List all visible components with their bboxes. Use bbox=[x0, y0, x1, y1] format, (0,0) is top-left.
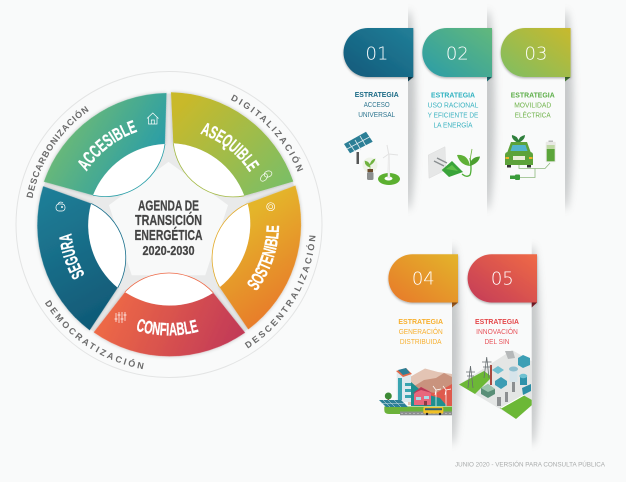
card 03: ELÉCTRICA bbox=[515, 110, 551, 120]
card 04 bbox=[388, 254, 458, 346]
center title bbox=[134, 198, 203, 258]
card 01: 01 bbox=[366, 44, 388, 64]
icon: house bbox=[147, 113, 158, 124]
card 04: DISTRIBUIDA bbox=[400, 337, 442, 346]
label: descarbonización: DESCARBONIZACIÓN bbox=[26, 106, 89, 198]
gaps behind segments bbox=[38, 94, 300, 356]
card 04: ESTRATEGIA bbox=[398, 317, 444, 326]
illustration: solar panel, bulb, wind turbine bbox=[344, 132, 400, 185]
card 02: LA ENERGÍA bbox=[434, 120, 473, 130]
center title: ENERGÉTICA bbox=[134, 227, 203, 244]
label: confiable: CONFIABLE bbox=[137, 319, 198, 336]
label: sostenible: SOSTENIBLE bbox=[247, 226, 280, 290]
icon: sliders bbox=[114, 312, 126, 323]
center title: TRANSICIÓN bbox=[135, 211, 202, 229]
footer note: JUNIO 2020 - VERSIÓN PARA CONSULTA PÚBLICA bbox=[455, 462, 605, 468]
center pentagon bbox=[109, 162, 228, 276]
card 05: ESTRATEGIA bbox=[475, 317, 520, 326]
card 02 bbox=[422, 28, 492, 130]
segment: segura bbox=[0, 174, 151, 330]
icon: leaves bbox=[259, 170, 273, 183]
card 05: INNOVACIÓN bbox=[476, 327, 518, 336]
illustration: power plant isometric bbox=[459, 350, 533, 419]
card 05: 05 bbox=[491, 268, 514, 290]
label: democratización: DEMOCRATIZACIÓN bbox=[45, 300, 144, 370]
card 04: GENERACIÓN bbox=[399, 327, 443, 336]
label: asequible: ASEQUIBLE bbox=[200, 122, 260, 172]
label: accesible: ACCESIBLE bbox=[78, 120, 138, 172]
label: segura: SEGURA bbox=[59, 233, 84, 280]
card 01: ESTRATEGIA bbox=[355, 90, 399, 99]
segment: accesible bbox=[44, 65, 181, 214]
card 05: DEL SIN bbox=[484, 337, 510, 346]
segment: sostenible bbox=[196, 186, 333, 334]
label: digitalización: DIGITALIZACIÓN bbox=[231, 94, 304, 172]
illustration: electric car and battery bbox=[505, 135, 556, 180]
card 02: Y EFICIENTE DE bbox=[428, 110, 478, 120]
card 03: 03 bbox=[525, 44, 547, 64]
card 02: USO RACIONAL bbox=[428, 100, 478, 110]
card 03 bbox=[501, 28, 571, 120]
icon: gear bbox=[267, 203, 275, 211]
card 03: MOVILIDAD bbox=[514, 100, 551, 110]
segment: asequible bbox=[171, 92, 293, 197]
illustration: green plug and outlet bbox=[428, 147, 480, 178]
card 01 bbox=[344, 28, 413, 119]
center title: 2020-2030 bbox=[142, 244, 195, 258]
card 02: 02 bbox=[446, 44, 469, 64]
icon: lock bbox=[56, 202, 65, 211]
card 02: ESTRATEGIA bbox=[431, 91, 476, 100]
outer ring bbox=[16, 72, 322, 378]
illustration: distributed generation town bbox=[379, 368, 452, 415]
card 04: 04 bbox=[412, 268, 435, 290]
card 01: UNIVERSAL bbox=[358, 110, 395, 119]
card 05 bbox=[468, 254, 537, 346]
column shadows bbox=[400, 10, 573, 445]
center title: AGENDA DE bbox=[138, 198, 199, 215]
card 03: ESTRATEGIA bbox=[511, 91, 555, 100]
segment: confiable bbox=[85, 248, 245, 405]
card 01: ACCESO bbox=[364, 100, 390, 109]
label: descentralización: DESCENTRALIZACIÓN bbox=[244, 236, 316, 348]
